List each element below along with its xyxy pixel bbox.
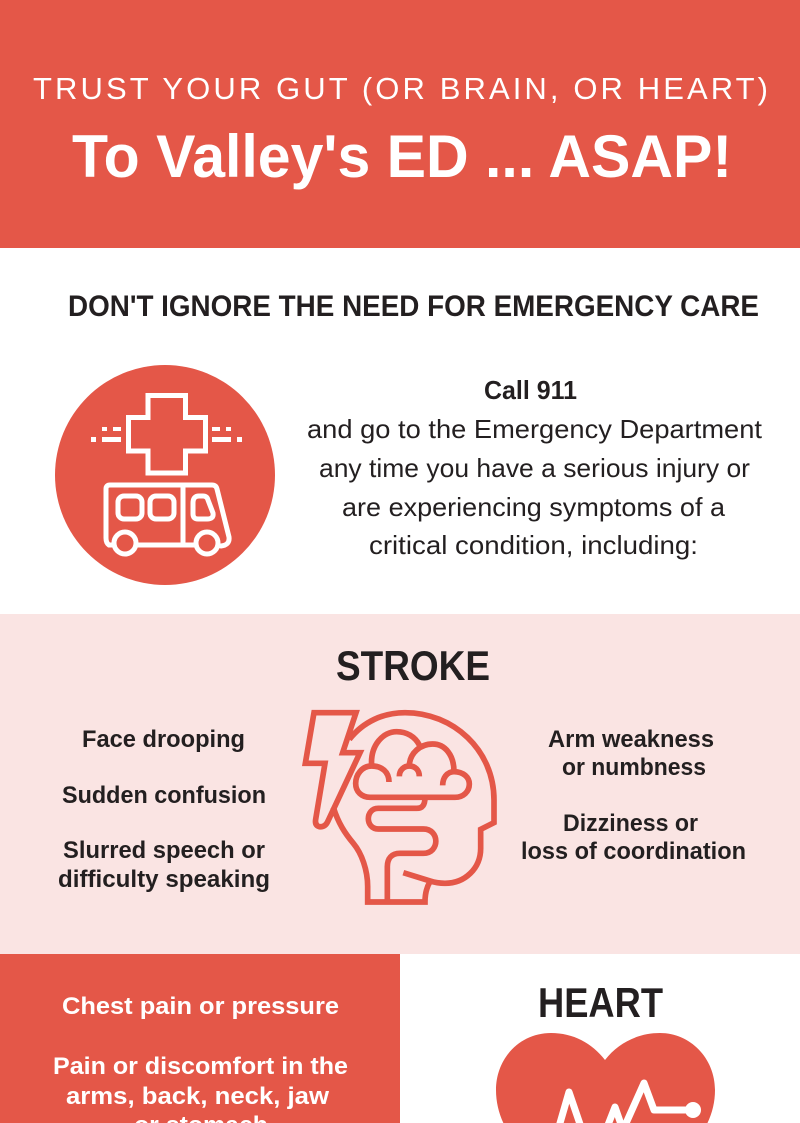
panel: heart symptoms [0, 954, 400, 1123]
section heading: DON'T IGNORE THE NEED FOR EMERGENCY CARE [68, 290, 759, 323]
call 911 text block: and go to the Emergency Department [307, 414, 763, 444]
header banner [0, 0, 800, 248]
call 911 text block: Call 911 [484, 375, 577, 405]
icon: head with brain and lightning [305, 713, 494, 902]
stroke symptoms left: Sudden confusion [62, 782, 266, 809]
stroke symptoms left: Slurred speech or [63, 837, 265, 864]
stroke symptoms right: loss of coordination [521, 838, 746, 865]
call 911 text block: are experiencing symptoms of a [342, 492, 726, 522]
panel: stroke [0, 614, 800, 954]
main title: To Valley's ED ... ASAP! [72, 123, 732, 190]
stroke symptoms right: Dizziness or [563, 810, 698, 837]
panel: heart symptoms: arms, back, neck, jaw [66, 1083, 329, 1110]
call 911 text block [307, 375, 763, 560]
stroke symptoms left [58, 726, 270, 893]
heart heading: HEART [538, 979, 663, 1026]
stroke symptoms left: difficulty speaking [58, 866, 270, 893]
stroke symptoms right: or numbness [562, 754, 706, 781]
icon: ambulance in circle [55, 365, 275, 585]
header kicker: TRUST YOUR GUT (OR BRAIN, OR HEART) [33, 71, 768, 106]
stroke symptoms right: Arm weakness [548, 726, 714, 753]
stroke heading: STROKE [336, 642, 490, 689]
call 911 text block: any time you have a serious injury or [319, 453, 750, 483]
stroke symptoms left: Face drooping [82, 726, 245, 753]
stroke symptoms right [521, 726, 746, 865]
icon: heart with pulse line [496, 1033, 715, 1123]
panel: heart symptoms: Chest pain or pressure [62, 993, 339, 1020]
panel: heart symptoms: Pain or discomfort in the [53, 1053, 348, 1080]
call 911 text block: critical condition, including: [369, 530, 698, 560]
